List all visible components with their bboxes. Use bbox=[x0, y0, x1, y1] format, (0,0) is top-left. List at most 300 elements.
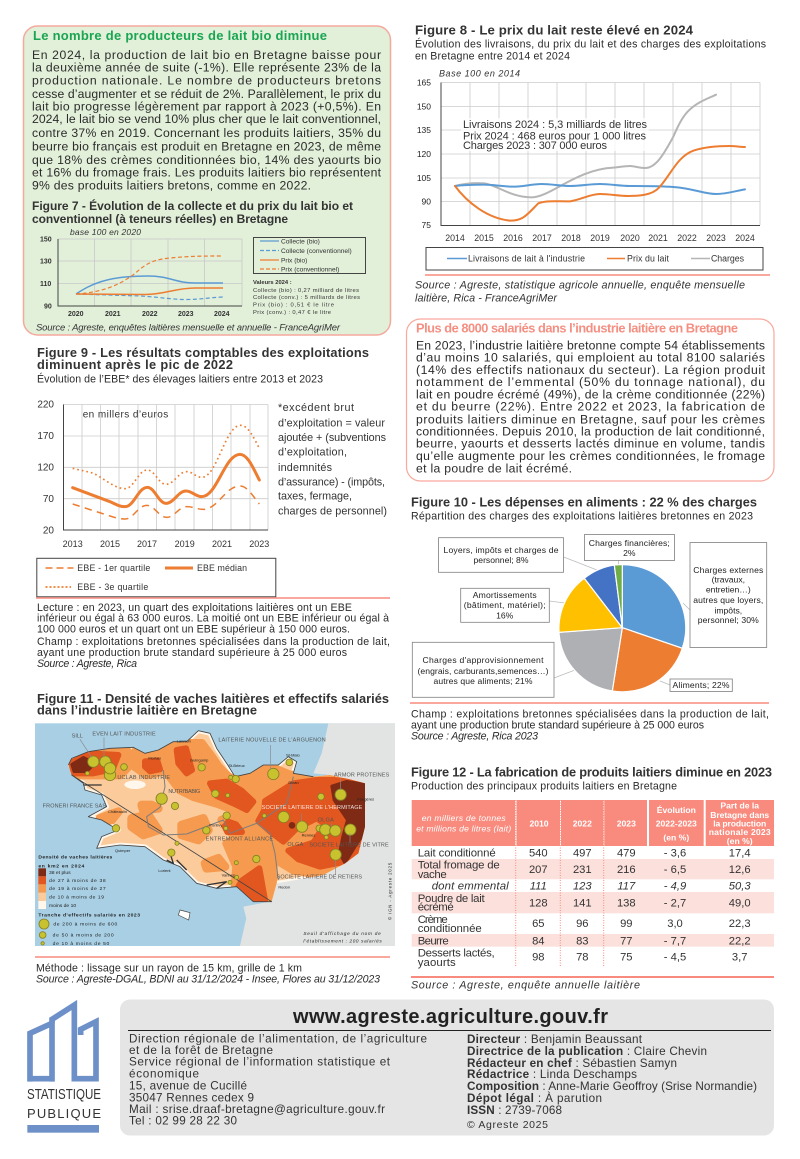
annotation: valeurs bbox=[461, 118, 649, 152]
city labels: Lorient bbox=[158, 868, 171, 873]
text block: lait bio: En 2024, la production de lait bio en Bretagne baisse pour bbox=[32, 48, 381, 62]
label: charges financières bbox=[584, 534, 674, 560]
panel: lait bio bbox=[24, 26, 390, 335]
row values: 22,2 bbox=[729, 935, 751, 947]
address bbox=[129, 1032, 427, 1128]
credits: © Agreste 2025 bbox=[467, 1119, 548, 1131]
source: figure 11: Méthode : lissage sur un rayon de 15 km, grille de 1 km bbox=[36, 962, 302, 974]
row values: - 3,6 bbox=[664, 848, 686, 860]
chart: figure 7: 110 bbox=[40, 281, 51, 288]
row values: 117 bbox=[617, 880, 636, 892]
city labels: Pontivy bbox=[209, 822, 222, 827]
row labels: écrémé bbox=[418, 902, 454, 914]
chart: figure 7 bbox=[40, 227, 366, 318]
row values: 84 bbox=[532, 935, 545, 947]
city labels: Vannes bbox=[222, 872, 235, 877]
text block: salariés: (14% des effectifs nationaux du secteur). La région produit bbox=[416, 363, 766, 377]
note: excédent brut: taxes, fermage, bbox=[278, 490, 352, 502]
city labels: Redon bbox=[278, 885, 290, 890]
credits: Rédacteur en chef : Sébastien Samyn bbox=[467, 1057, 677, 1070]
chart: figure 8: 135 bbox=[417, 125, 431, 135]
company labels: NUTRI'BABIG bbox=[168, 789, 200, 795]
row values: 12,6 bbox=[729, 864, 751, 876]
heading: figure 9 bbox=[37, 345, 369, 386]
map legend: de 10 à moins de 19 bbox=[49, 894, 104, 900]
chart: figure 7: 2021 bbox=[105, 311, 121, 318]
address: Direction régionale de l’alimentation, de l’agriculture bbox=[129, 1032, 427, 1045]
table header: Évolution bbox=[657, 805, 696, 815]
row values: 216 bbox=[617, 864, 636, 876]
establishments bbox=[85, 756, 356, 884]
label: aliments: Aliments; 22% bbox=[672, 680, 730, 690]
row values: 50,3 bbox=[729, 880, 751, 892]
text block: lecture: inférieur ou égal à 63 000 euros. La moitié ont un EBE inférieur ou égal à bbox=[37, 613, 389, 625]
heading: figure 9: Évolution de l’EBE* des élevages laitiers entre 2013 et 2023 bbox=[37, 372, 323, 386]
heading: figure 8: Figure 8 - Le prix du lait reste élevé en 2024 bbox=[415, 22, 694, 38]
land density bbox=[63, 727, 370, 907]
chart: figure 7: Valeurs 2024 : bbox=[253, 280, 292, 286]
label: approvisionnement: (engrais, carburants,semences…) bbox=[418, 666, 549, 676]
chart: figure 8: 2024 bbox=[735, 233, 755, 243]
panel: footer bbox=[120, 1000, 774, 1136]
row values: 138 bbox=[617, 898, 636, 910]
chart: figure 7: 90 bbox=[44, 304, 52, 310]
heading: figure 9: Figure 9 - Les résultats comptables des exploitations bbox=[37, 345, 369, 360]
panel: salariés bbox=[406, 319, 774, 481]
chart: figure 9: 170 bbox=[37, 431, 54, 442]
row values: 231 bbox=[573, 864, 592, 876]
row values: 111 bbox=[530, 880, 547, 892]
city labels: Dinan bbox=[288, 780, 299, 785]
chart: figure 8: 105 bbox=[417, 173, 431, 183]
company labels: SOCIETE LAITIERE DE VITRE bbox=[309, 843, 389, 849]
address: Mail : srise.draaf-bretagne@agriculture.gouv.fr bbox=[129, 1103, 385, 1116]
text block: champ figure 10 bbox=[411, 708, 769, 742]
row values: 497 bbox=[573, 848, 592, 860]
company labels: ARMOR PROTEINES bbox=[334, 773, 390, 779]
chart: figure 7: Collecte (bio) : 0,27 milliard de litres bbox=[253, 288, 359, 294]
row values: - 4,9 bbox=[664, 880, 686, 892]
text block: lait bio: cesse d’augmenter et se réduit de 2%. Parallèlement, le prix du bbox=[32, 87, 381, 101]
label: amortissements bbox=[461, 588, 549, 622]
note: excédent brut: d’exploitation = valeur bbox=[278, 418, 385, 430]
row values: 207 bbox=[529, 864, 548, 876]
legend: figure 9: EBE médian bbox=[197, 563, 247, 573]
leader lines bbox=[80, 737, 350, 875]
note: excédent brut: *excédent brut bbox=[278, 402, 354, 414]
company labels bbox=[43, 732, 390, 880]
label: charges externes: impôts, bbox=[714, 605, 742, 615]
heading: salariés: Plus de 8000 salariés dans l’industrie laitière en Bretagne bbox=[416, 320, 738, 336]
label: charges externes bbox=[690, 542, 767, 648]
heading: figure 9: diminuent après le pic de 2022 bbox=[37, 357, 233, 372]
chart: figure 8 bbox=[417, 68, 763, 270]
chart: figure 8: 2019 bbox=[590, 233, 610, 243]
note: excédent brut: d’exploitation, bbox=[278, 446, 347, 458]
note: excédent brut: ajoutée + (subventions bbox=[278, 432, 387, 444]
chart: figure 9: 120 bbox=[37, 462, 54, 474]
row labels: Lait conditionné bbox=[418, 848, 496, 860]
coast outline bbox=[68, 731, 313, 902]
credits bbox=[467, 1033, 757, 1131]
chart: figure 8: 150 bbox=[417, 102, 431, 112]
row labels: vache bbox=[418, 869, 447, 881]
chart: figure 7: 2023 bbox=[178, 311, 194, 318]
heading: figure 12: Production des principaux produits laitiers en Bretagne bbox=[411, 780, 677, 792]
label: loyers bbox=[438, 538, 564, 572]
row values: 123 bbox=[573, 880, 592, 892]
label: charges externes: autres que loyers, bbox=[693, 595, 763, 605]
row labels: conditionnée bbox=[418, 923, 482, 935]
row values: 479 bbox=[617, 848, 636, 860]
legend: figure 8 bbox=[426, 248, 763, 270]
text block: lecture: Lecture : en 2023, un quart des exploitations laitières ont un EBE bbox=[37, 602, 352, 614]
row values: - 7,7 bbox=[664, 935, 686, 947]
map: figure 11 bbox=[35, 723, 395, 947]
text block: salariés: lait en poudre écrémé (49%), de la crème conditionnée (22%) bbox=[416, 388, 765, 402]
chart: figure 8: 2017 bbox=[532, 233, 552, 243]
label: charges financières: 2% bbox=[623, 548, 636, 558]
chart: figure 9 bbox=[37, 400, 276, 597]
chart: figure 8: 2020 bbox=[620, 233, 640, 243]
map legend: 38 et plus bbox=[49, 870, 71, 876]
table header: 2022 bbox=[573, 818, 592, 828]
row values: 98 bbox=[532, 952, 545, 964]
label: approvisionnement: autres que aliments; 21% bbox=[434, 676, 533, 686]
map legend: de 19 à moins de 27 bbox=[49, 886, 106, 892]
row labels bbox=[418, 848, 509, 969]
address: 35047 Rennes cedex 9 bbox=[129, 1091, 254, 1104]
row values: - 6,5 bbox=[664, 864, 686, 876]
chart: figure 8: 120 bbox=[417, 149, 431, 159]
chart: figure 8: 2023 bbox=[706, 233, 726, 243]
text block: salariés: notamment de l’emmental (50% du tonnage national), du bbox=[416, 375, 765, 389]
city labels bbox=[108, 739, 374, 890]
row values: - 4,5 bbox=[664, 952, 686, 964]
table header: et millions de litres (lait) bbox=[416, 824, 511, 834]
legend: figure 9: EBE - 3e quartile bbox=[77, 582, 148, 592]
chart: figure 10 pie bbox=[412, 534, 767, 697]
credits: Dépot légal : À parution bbox=[467, 1092, 602, 1105]
row values: 83 bbox=[576, 935, 589, 947]
table header: (en %) bbox=[727, 836, 753, 846]
credits: ISSN : 2739-7068 bbox=[467, 1104, 562, 1117]
text block: salariés: qu’elle augmente pour les crèmes conditionnées, le fromage bbox=[416, 449, 765, 463]
table header: (en %) bbox=[663, 832, 689, 842]
heading: figure 7: Figure 7 - Évolution de la collecte et du prix du lait bio et bbox=[32, 198, 353, 213]
city labels: St-Malo bbox=[286, 753, 301, 758]
source: figure 11 bbox=[36, 962, 380, 986]
row values: 128 bbox=[529, 898, 548, 910]
chart: figure 7: Prix (conventionnel) bbox=[281, 266, 339, 273]
company labels: SILL bbox=[72, 733, 83, 739]
table header: Bretagne dans bbox=[710, 810, 769, 820]
credits: Composition : Anne-Marie Geoffroy (Srise Normandie) bbox=[467, 1080, 757, 1093]
heading: figure 12 bbox=[411, 764, 772, 792]
note: excédent brut bbox=[278, 402, 387, 518]
chart: figure 7: 2024 bbox=[214, 311, 230, 318]
label: charges externes: entretien…) bbox=[706, 584, 751, 594]
label: amortissements: (bâtiment, matériel); bbox=[464, 600, 546, 610]
chart: figure 9: 2013 bbox=[63, 539, 83, 549]
chart: figure 8: 2021 bbox=[648, 233, 668, 243]
row values: 17,4 bbox=[729, 848, 751, 860]
borders bbox=[147, 770, 293, 880]
company labels: FRONERI FRANCE SAS bbox=[43, 804, 106, 810]
heading: figure 8 bbox=[415, 22, 766, 62]
company labels: OLGA bbox=[287, 842, 304, 848]
table header: la production bbox=[713, 818, 766, 828]
text block: lait bio: la deuxième année de suite (-1%). Elle représente 23% de la bbox=[32, 60, 381, 74]
label: charges financières: Charges financières; bbox=[589, 538, 670, 548]
chart: figure 7: 2022 bbox=[142, 311, 158, 318]
text block: lait bio: et 16% du fromage frais. Les produits laitiers bio représentent bbox=[32, 166, 382, 180]
chart: figure 8: 2018 bbox=[561, 233, 581, 243]
text block: lait bio bbox=[32, 48, 382, 193]
company labels: UCLAB INDUSTRIE bbox=[117, 775, 170, 781]
legend: figure 9 bbox=[37, 558, 276, 597]
company labels: SOCIETE LAITIERE DE L'HERMITAGE bbox=[262, 805, 363, 811]
row values: 99 bbox=[620, 918, 633, 930]
chart: figure 7: Prix (bio) : 0,51 € le litre bbox=[253, 303, 334, 309]
map legend: de 50 à moins de 200 bbox=[53, 933, 114, 939]
heading: figure 8: en Bretagne entre 2014 et 2024 bbox=[415, 50, 570, 62]
row labels: dont emmental bbox=[432, 880, 509, 892]
chart: figure 7: Prix (bio) bbox=[281, 257, 307, 264]
text block: salariés: produits laitiers diminue en Bretagne, sauf pour les crèmes bbox=[416, 412, 765, 426]
note: excédent brut: d’assurance) - (impôts, bbox=[278, 476, 385, 488]
row values: - 2,7 bbox=[664, 898, 686, 910]
map legend: © IGN - Agreste 2025 bbox=[387, 862, 392, 920]
heading: figure 10 bbox=[411, 494, 757, 522]
row labels: Poudre de lait bbox=[418, 893, 486, 905]
chart: figure 9: 2017 bbox=[137, 539, 157, 549]
label: loyers: Loyers, impôts et charges de bbox=[444, 545, 559, 555]
city labels: St-Brieuc bbox=[228, 763, 245, 768]
chart: figure 7: 2020 bbox=[68, 311, 84, 318]
label: amortissements: Amortissements bbox=[473, 590, 537, 600]
text block: lait bio: production nationale. Le nombre de producteurs bretons bbox=[32, 74, 381, 88]
address: et de la forêt de Bretagne bbox=[129, 1044, 273, 1057]
legend: figure 8: Prix du lait bbox=[627, 254, 670, 264]
company labels: ENTREMONT ALLIANCE bbox=[206, 837, 273, 843]
logo: statistique publique: PUBLIQUE bbox=[27, 1106, 101, 1121]
table header: 2023 bbox=[617, 818, 636, 828]
label: charges externes: personnel; 30% bbox=[698, 615, 759, 625]
heading: figure 10: Figure 10 - Les dépenses en aliments : 22 % des charges bbox=[411, 494, 757, 510]
label: approvisionnement bbox=[412, 642, 554, 697]
text block: salariés: et du beurre (22%). Entre 2022 et 2023, la fabrication de bbox=[416, 400, 765, 414]
row values: 141 bbox=[573, 898, 592, 910]
row values: 78 bbox=[576, 952, 589, 964]
company labels: SOCIETE LAITIERE DE RETIERS bbox=[277, 874, 362, 880]
map legend: de 27 à moins de 38 bbox=[49, 878, 106, 884]
text block: lecture bbox=[37, 602, 390, 670]
label: loyers: personnel; 8% bbox=[474, 555, 529, 565]
text block: lait bio: 9% des produits laitiers bretons, comme en 2022. bbox=[32, 179, 311, 193]
heading: figure 10: Répartition des charges des exploitations laitières bretonnes en 2023 bbox=[411, 510, 753, 522]
heading: figure 7 bbox=[32, 198, 353, 226]
chart: figure 9: 2015 bbox=[100, 539, 120, 549]
address: économique bbox=[129, 1067, 199, 1080]
chart: figure 8: 2016 bbox=[503, 233, 523, 243]
heading: figure 8: Évolution des livraisons, du prix du lait et des charges des exploitations bbox=[415, 38, 766, 50]
text block: lecture: ayant une production brute standard supérieure à 25 000 euros bbox=[37, 647, 347, 659]
source: figure 8: laitière, Rica - FranceAgriMer bbox=[415, 292, 557, 304]
map legend: de 200 à moins de 600 bbox=[53, 922, 118, 928]
legend: figure 8: Charges bbox=[711, 254, 745, 264]
chart: figure 7: base 100 en 2020 bbox=[70, 227, 141, 237]
city labels: Rennes bbox=[302, 833, 315, 838]
city labels: Châteaulin bbox=[108, 809, 127, 814]
row values: 65 bbox=[532, 918, 545, 930]
chart: figure 9: en millers d’euros bbox=[83, 410, 168, 420]
annotation: valeurs: Livraisons 2024 : 5,3 milliards de litres bbox=[463, 119, 648, 131]
map legend: Tranche d'effectifs salariés en 2023 bbox=[38, 913, 140, 919]
text block: salariés: conditionnées. Depuis 2010, la production de lait conditionné, bbox=[416, 425, 765, 439]
heading: figure 11: dans l’industrie laitière en Bretagne bbox=[37, 702, 257, 718]
company labels: EVEN LAIT INDUSTRIE bbox=[92, 732, 156, 738]
source: figure 7: Source : Agreste, enquêtes laitières mensuelle et annuelle - FranceAgriMer bbox=[36, 322, 341, 334]
map legend bbox=[38, 854, 392, 947]
row values: 3,7 bbox=[732, 952, 747, 964]
table bands bbox=[412, 859, 774, 947]
row labels: Beurre bbox=[418, 935, 449, 947]
row values: 22,3 bbox=[729, 918, 751, 930]
text block: lait bio: beurre bio français est produit en Bretagne en 2023, de même bbox=[32, 140, 381, 154]
city labels: Guingamp bbox=[190, 758, 209, 763]
text block: salariés: d’au moins 10 salariés, qui emploient au total 8100 salariés bbox=[416, 351, 765, 365]
address: Tel : 02 99 28 22 30 bbox=[129, 1114, 237, 1128]
table header: en milliers de tonnes bbox=[422, 813, 506, 823]
chart: figure 7: Prix (conv.) : 0,47 € le litre bbox=[253, 310, 331, 316]
city labels: Lannion bbox=[177, 739, 191, 744]
chart: figure 9: 220 bbox=[37, 400, 54, 410]
map legend: l'établissement : 200 salariés bbox=[303, 939, 382, 944]
chart: figure 9: 2021 bbox=[212, 539, 232, 549]
chart: figure 7: 130 bbox=[40, 258, 52, 266]
chart: figure 7: 150 bbox=[40, 236, 52, 244]
source: figure 8: Source : Agreste, statistique agricole annuelle, enquête mensuelle bbox=[415, 280, 745, 292]
chart: figure 8: 2014 bbox=[445, 233, 465, 243]
text block: salariés: et la poudre de lait écrémé. bbox=[416, 461, 572, 475]
url: www.agreste.agriculture.gouv.fr bbox=[292, 1006, 608, 1028]
text block: lecture: 100 000 euros et un quart ont un EBE supérieur à 150 000 euros. bbox=[37, 624, 350, 636]
row values: 75 bbox=[620, 952, 633, 964]
company labels: OLGA bbox=[318, 818, 334, 824]
text block: lait bio: contre 37% en 2019. Concernant les produits laitiers, 35% du bbox=[32, 126, 381, 140]
table header: Part de la bbox=[720, 800, 759, 810]
heading: figure 11: Figure 11 - Densité de vaches laitières et effectifs salariés bbox=[37, 691, 389, 706]
note: excédent brut: indemnités bbox=[278, 462, 333, 474]
row values: 49,0 bbox=[729, 898, 751, 910]
label: approvisionnement: Charges d'approvisionnement bbox=[422, 655, 544, 665]
logo: statistique publique: STATISTIQUE bbox=[27, 1086, 101, 1103]
map legend: Densité de vaches laitières bbox=[38, 854, 113, 860]
row labels: Crème bbox=[418, 914, 448, 926]
legend: figure 9: EBE - 1er quartile bbox=[77, 563, 150, 573]
row values: 540 bbox=[529, 848, 548, 860]
table header: 2022-2023 bbox=[656, 818, 697, 828]
table header bbox=[412, 800, 774, 846]
credits: Rédactrice : Linda Deschamps bbox=[467, 1068, 637, 1081]
text block: champ figure 10: Champ : exploitations bretonnes spécialisées dans la production de lait, bbox=[411, 708, 769, 720]
row labels: yaourts bbox=[418, 957, 456, 969]
source: figure 12: Source : Agreste, enquête annuelle laitière bbox=[411, 980, 640, 992]
address: Service régional de l’information statistique et bbox=[129, 1056, 391, 1069]
annotation: valeurs: Prix 2024 : 468 euros pour 1 000 litres bbox=[463, 130, 646, 142]
city labels: Morlaix bbox=[148, 755, 161, 760]
heading: figure 7: conventionnel (à teneurs réelles) en Bretagne bbox=[32, 212, 288, 226]
chart: figure 9: 20 bbox=[43, 526, 54, 536]
row labels: Desserts lactés, bbox=[418, 948, 495, 960]
chart: figure 8: 2015 bbox=[474, 233, 494, 243]
row values: 96 bbox=[576, 918, 589, 930]
note: excédent brut: charges de personnel) bbox=[278, 506, 387, 518]
chart: figure 8: 165 bbox=[417, 78, 431, 88]
row values: 77 bbox=[620, 935, 633, 947]
label: charges externes: (travaux, bbox=[712, 574, 745, 584]
row labels: Total fromage de bbox=[418, 860, 500, 872]
source: figure 11: Source : Agreste-DGAL, BDNI au 31/12/2024 - Insee, Flores au 31/12/2023 bbox=[36, 974, 380, 986]
city labels: Fougères bbox=[357, 797, 374, 802]
table: figure 12 bbox=[412, 800, 774, 969]
text block: salariés: beurre, yaourts et desserts lactés diminue en volume, tandis bbox=[416, 436, 765, 450]
text block: champ figure 10: Source : Agreste, Rica 2023 bbox=[411, 730, 538, 742]
credits: Directeur : Benjamin Beaussant bbox=[467, 1033, 643, 1046]
city labels: Quimper bbox=[115, 848, 131, 853]
heading: lait bio: Le nombre de producteurs de lait bio diminue bbox=[33, 28, 327, 43]
map legend: moins de 10 bbox=[49, 903, 76, 909]
table header: 2010 bbox=[529, 818, 549, 828]
map legend: en km2 en 2024 bbox=[38, 863, 85, 869]
chart: figure 9: 2023 bbox=[249, 539, 269, 549]
chart: figure 7: Collecte (bio) bbox=[281, 238, 320, 245]
text block: lecture: Source : Agreste, Rica bbox=[37, 658, 137, 670]
chart: figure 7: Collecte (conventionnel) bbox=[281, 248, 352, 255]
text block: lait bio: lait bio progresse légèrement par rapport à 2023 (+0,5%). En bbox=[32, 100, 381, 114]
heading: figure 11 bbox=[37, 691, 389, 718]
coast details bbox=[83, 785, 227, 888]
source: figure 8 bbox=[415, 280, 745, 304]
company labels: LAITERIE NOUVELLE DE L'ARGUENON bbox=[218, 738, 326, 744]
table header: nationale 2023 bbox=[709, 827, 771, 837]
text block: salariés bbox=[416, 339, 766, 475]
chart: figure 7: Collecte (conv.) : 5 milliards de litres bbox=[253, 295, 360, 301]
credits: Directrice de la publication : Claire Chevin bbox=[467, 1045, 707, 1058]
chart: figure 8: 90 bbox=[422, 196, 431, 206]
label: amortissements: 16% bbox=[496, 611, 514, 621]
text block: lait bio: 2024, le lait bio se vend 10% plus cher que le lait conventionnel, bbox=[32, 112, 381, 126]
text block: lecture: Champ : exploitations bretonnes spécialisées dans la production de lait, bbox=[37, 636, 390, 648]
row values bbox=[529, 848, 751, 964]
logo: statistique publique bbox=[27, 1005, 101, 1133]
label: charges externes: Charges externes bbox=[693, 565, 763, 575]
map legend: Seuil d'affichage du nom de bbox=[303, 931, 381, 936]
annotation: valeurs: Charges 2023 : 307 000 euros bbox=[463, 140, 608, 152]
chart: figure 8: Base 100 en 2014 bbox=[439, 68, 520, 78]
chart: figure 9: 2019 bbox=[175, 539, 195, 549]
row values: 3,0 bbox=[667, 918, 683, 930]
text block: lait bio: que 18% des crèmes conditionnées bio, 14% des yaourts bio bbox=[32, 153, 381, 167]
address: 15, avenue de Cucillé bbox=[129, 1080, 247, 1093]
text block: champ figure 10: ayant une production brute standard supérieure à 25 000 euros bbox=[411, 720, 704, 732]
heading: figure 12: Figure 12 - La fabrication de produits laitiers diminue en 2023 bbox=[411, 764, 772, 780]
legend: figure 8: Livraisons de lait à l'industrie bbox=[468, 254, 585, 264]
map legend: de 10 à moins de 50 bbox=[53, 941, 110, 947]
chart: figure 8: 2022 bbox=[677, 233, 697, 243]
chart: figure 9: 70 bbox=[43, 494, 54, 505]
